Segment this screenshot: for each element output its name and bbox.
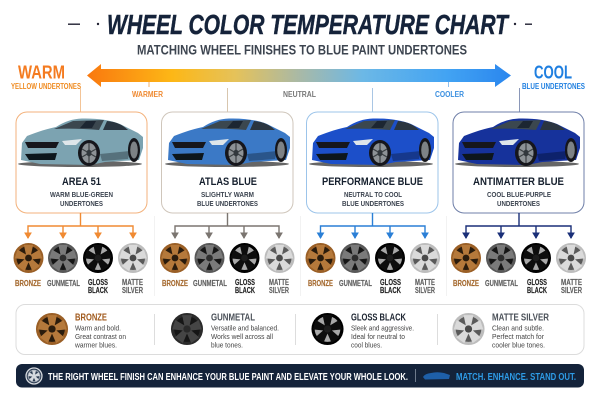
wheel labels: Antimatter Blue: BLACK	[527, 286, 547, 295]
wheels: Atlas Blue	[160, 243, 294, 273]
legend: bronze: BRONZE	[75, 312, 107, 324]
wheel labels: Performance Blue: MATTE	[415, 278, 435, 287]
undertone: Atlas Blue	[197, 190, 258, 208]
legend: gunmetal: Works well across all	[211, 334, 273, 341]
wheel labels: Atlas Blue: MATTE	[269, 278, 289, 287]
scale labels: NEUTRAL	[283, 90, 316, 99]
icon: footer car	[423, 372, 450, 380]
car: Atlas Blue	[165, 118, 290, 167]
wheel labels: Atlas Blue: SILVER	[269, 286, 289, 295]
car: Performance Blue	[309, 118, 434, 167]
undertone: Antimatter Blue: COOL BLUE-PURPLE	[487, 190, 551, 199]
panel: finish legend	[16, 304, 584, 354]
wheel labels: Antimatter Blue: GLOSS	[527, 278, 547, 287]
wheel labels: Antimatter Blue	[453, 278, 583, 295]
undertone: Atlas Blue: BLUE UNDERTONES	[197, 199, 258, 208]
panel: Area 51	[16, 112, 147, 213]
scale labels	[132, 82, 464, 99]
wheel labels: Area 51: BRONZE	[15, 279, 42, 288]
wheel labels: Atlas Blue: BRONZE	[162, 279, 189, 288]
legend: bronze	[36, 312, 126, 350]
wheel labels: Antimatter Blue: SILVER	[561, 286, 582, 295]
legend: gunmetal: GUNMETAL	[211, 312, 255, 324]
wheel labels: Performance Blue: BRONZE	[308, 279, 333, 288]
car: Area 51	[18, 118, 143, 167]
footer message: THE RIGHT WHEEL FINISH CAN ENHANCE YOUR BLUE PAINT AND ELEVATE YOUR WHOLE LOOK.	[48, 372, 408, 383]
legend: matte silver: cooler blue tones.	[492, 342, 545, 350]
cool label	[522, 62, 586, 91]
legend: gloss black: cool blues.	[351, 342, 382, 350]
wheel labels: Atlas Blue	[162, 278, 289, 295]
scale labels: WARMER	[132, 90, 163, 99]
legend: matte silver: Perfect match for	[492, 334, 545, 341]
cool label: COOL	[534, 62, 572, 82]
legend: gunmetal	[171, 312, 279, 350]
column separators	[154, 216, 447, 296]
undertone: Performance Blue: BLUE UNDERTONES	[342, 199, 404, 208]
temperature gradient arrow	[87, 64, 511, 87]
wheels: Performance Blue	[306, 243, 440, 273]
panel: Antimatter Blue	[453, 112, 584, 213]
legend: bronze: warmer blues.	[74, 342, 117, 350]
car: Antimatter Blue	[455, 118, 580, 167]
cool label: BLUE UNDERTONES	[522, 82, 586, 91]
legend: gloss black: Ideal for neutral to	[351, 334, 405, 341]
undertone: Performance Blue	[342, 190, 404, 208]
legend: bronze: Warm and bold.	[75, 326, 121, 332]
legend: gloss black	[311, 312, 414, 350]
undertone: Atlas Blue: SLIGHTLY WARM	[201, 190, 254, 199]
name: Atlas Blue: ATLAS BLUE	[199, 176, 257, 188]
connector arrows: Area 51	[25, 213, 136, 238]
name: Area 51: AREA 51	[62, 176, 101, 188]
scale labels: COOLER	[435, 90, 464, 99]
wheel labels: Area 51: GUNMETAL	[47, 279, 80, 288]
subtitle: MATCHING WHEEL FINISHES TO BLUE PAINT UNDERTONES	[137, 42, 467, 58]
wheels: Antimatter Blue	[451, 243, 586, 273]
wheel labels: Performance Blue: BLACK	[380, 286, 401, 295]
warm label: WARM	[18, 62, 65, 82]
legend: gunmetal: Versatile and balanced.	[211, 326, 279, 332]
wheel labels: Performance Blue: GUNMETAL	[339, 279, 372, 288]
warm label	[11, 62, 81, 91]
legend: gloss black: Sleek and aggressive.	[351, 326, 414, 332]
undertone: Area 51: UNDERTONES	[60, 199, 103, 208]
legend: gloss black: GLOSS BLACK	[351, 312, 407, 324]
wheels: Area 51	[14, 243, 148, 273]
icon: footer wheel	[26, 368, 42, 384]
wheel labels: Performance Blue	[308, 278, 435, 295]
legend: gunmetal: blue tones.	[211, 342, 243, 350]
legend: matte silver: Clean and subtle.	[492, 326, 544, 332]
connector arrows: Antimatter Blue	[463, 213, 574, 238]
legend: matte silver	[452, 312, 550, 350]
wheel labels: Area 51: GLOSS	[88, 278, 108, 287]
legend: matte silver: MATTE SILVER	[492, 312, 550, 324]
undertone: Antimatter Blue: UNDERTONES	[497, 199, 540, 208]
wheel labels: Performance Blue: SILVER	[415, 286, 435, 295]
wheel labels: Performance Blue: GLOSS	[380, 278, 401, 287]
undertone: Performance Blue: NEUTRAL TO COOL	[344, 190, 402, 199]
wheel labels: Area 51: MATTE	[122, 278, 144, 287]
wheel labels: Atlas Blue: BLACK	[235, 286, 255, 295]
undertone: Antimatter Blue	[487, 190, 551, 208]
wheel labels: Area 51: SILVER	[122, 286, 143, 295]
footer banner	[16, 364, 584, 388]
panel: Performance Blue	[306, 112, 438, 213]
connector arrows: Atlas Blue	[172, 213, 282, 238]
wheel labels: Antimatter Blue: GUNMETAL	[485, 279, 518, 288]
panel: Atlas Blue	[162, 112, 293, 213]
wheel labels: Antimatter Blue: MATTE	[561, 278, 583, 287]
wheel labels: Atlas Blue: GLOSS	[235, 278, 255, 287]
undertone: Area 51	[50, 190, 113, 208]
scale drop lines	[80, 88, 520, 112]
undertone: Area 51: WARM BLUE-GREEN	[50, 190, 113, 199]
connector arrows: Performance Blue	[318, 213, 428, 238]
wheel labels: Antimatter Blue: BRONZE	[453, 279, 480, 288]
name: Performance Blue: PERFORMANCE BLUE	[322, 176, 423, 188]
warm label: YELLOW UNDERTONES	[11, 82, 81, 91]
wheel labels: Atlas Blue: GUNMETAL	[193, 279, 227, 288]
wheel labels: Area 51: BLACK	[88, 286, 108, 295]
name: Antimatter Blue: ANTIMATTER BLUE	[473, 176, 564, 188]
legend: bronze: Great contrast on	[75, 334, 126, 341]
wheel labels: Area 51	[15, 278, 144, 295]
